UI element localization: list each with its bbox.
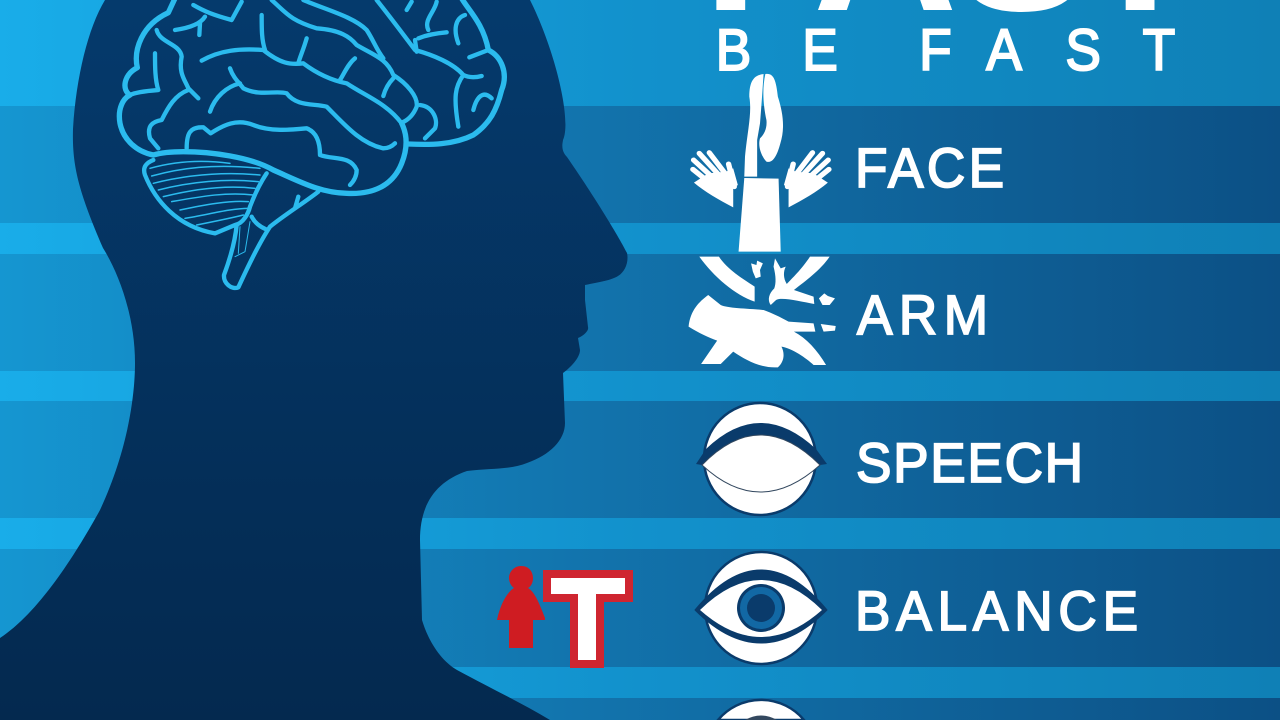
right hand (784, 153, 829, 207)
subtitle BE FAST: A (986, 18, 1023, 82)
label SPEECH: SPEECH (856, 432, 1083, 494)
head silhouette (0, 0, 628, 720)
icon: speech eye (696, 403, 827, 515)
icon: red person (497, 566, 545, 648)
icon: bottom eye (cropped) (718, 700, 804, 720)
brain outline (119, 0, 504, 155)
subtitle BE FAST: T (1143, 18, 1175, 82)
label BALANCE: BALANCE (855, 580, 1138, 642)
label FACE: FACE (855, 137, 1004, 199)
icon: arm and branches (689, 257, 836, 367)
icon: balance eye (695, 552, 827, 664)
cerebellum (144, 160, 267, 233)
brain main folds (153, 123, 406, 193)
subtitle BE FAST: B (716, 18, 751, 82)
brain (119, 0, 504, 288)
subtitle BE FAST: E (802, 18, 838, 82)
subtitle BE FAST: F (919, 18, 952, 82)
subtitle BE FAST: S (1065, 18, 1101, 82)
icon: red outlined T (547, 574, 629, 664)
label ARM: ARM (857, 284, 988, 346)
icon: hands and raised arm (693, 74, 829, 252)
brain stem (224, 192, 318, 288)
left hand (693, 153, 738, 207)
